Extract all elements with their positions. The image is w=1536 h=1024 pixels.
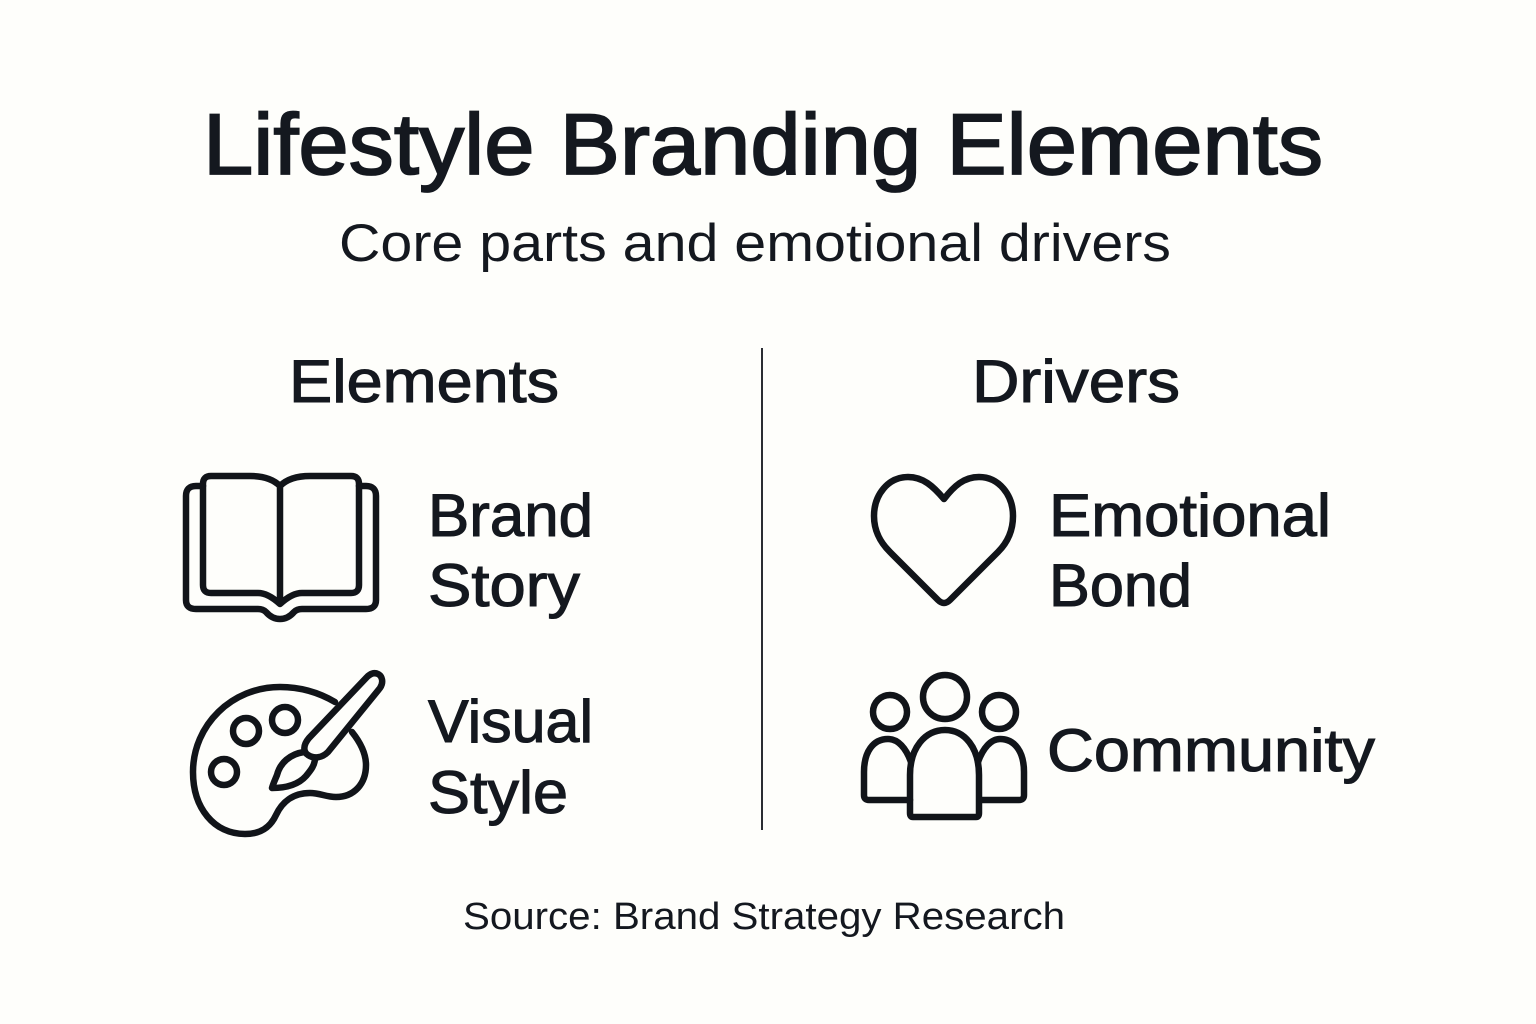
- title: Lifestyle Branding Elements: [203, 97, 1323, 193]
- heading: drivers: Drivers: [972, 348, 1180, 415]
- item: brand story: [186, 476, 593, 619]
- label: visual style: Visual: [428, 688, 593, 755]
- icon: open book: [186, 476, 376, 619]
- label: emotional bond: Bond: [1049, 552, 1192, 619]
- subtitle: Core parts and emotional drivers: [339, 214, 1171, 273]
- item: emotional bond: [874, 477, 1331, 619]
- item: visual style: [193, 673, 593, 834]
- label: brand story: Brand: [428, 482, 593, 549]
- icon: three people: [864, 675, 1024, 817]
- panel: elements: [186, 348, 593, 834]
- label: community: Community: [1047, 717, 1375, 784]
- label: visual style: Style: [428, 759, 568, 826]
- icon: heart: [874, 477, 1013, 603]
- vertical divider: [761, 348, 763, 830]
- item: community: [864, 675, 1375, 817]
- heading: elements: Elements: [289, 348, 559, 415]
- label: brand story: Story: [428, 552, 580, 619]
- source note: Source: Brand Strategy Research: [463, 896, 1065, 938]
- icon: palette and brush: [193, 673, 382, 834]
- panel: drivers: [864, 348, 1375, 817]
- label: emotional bond: Emotional: [1049, 482, 1331, 549]
